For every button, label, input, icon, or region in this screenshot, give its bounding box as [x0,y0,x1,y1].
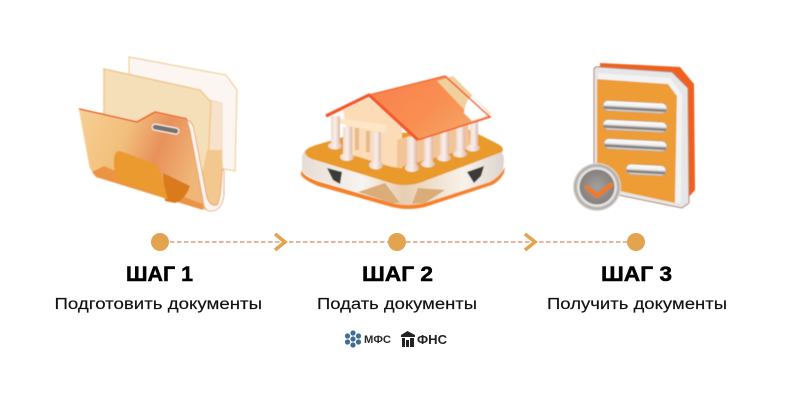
sub-icon: roof [369,76,490,140]
logo: ФНС [401,331,448,347]
step 3 heading: ШАГ 3 [601,263,672,286]
sub-icon: text lines [603,100,667,176]
logo: ФНС: ФНС [417,332,448,347]
logo: МФС [345,330,391,348]
step 2 label: Подать документы [317,296,477,313]
sub-icon: folder pocket tab [114,151,190,203]
step 1 label: Подготовить документы [54,296,262,313]
sub-icon: check badge [573,163,621,211]
sub-icon: walls [343,98,402,168]
sub-icon: glass base [302,134,504,205]
icon: document with check badge [573,63,695,211]
icon: government building [301,76,505,209]
sub-icon: orange platform [305,130,503,185]
step 3 label: Получить документы [547,296,727,313]
sub-icon: columns [328,116,480,172]
step 2 heading: ШАГ 2 [362,263,433,286]
step 3 dot [627,233,645,251]
step 2 dot [388,233,406,251]
step 1 heading: ШАГ 1 [126,263,193,286]
timeline connector [151,233,645,251]
arrow 1 [275,234,285,250]
icon: folder with documents [79,57,237,211]
step 1 dot [151,233,169,251]
logo: МФС: МФС [364,334,391,346]
arrow 2 [525,234,535,250]
sub-icon: folder slot [152,124,179,135]
